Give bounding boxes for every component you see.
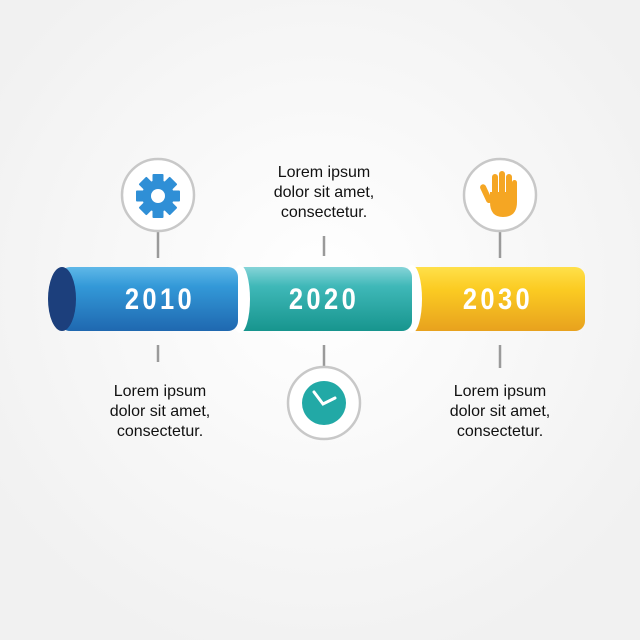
- text: 2030: consectetur.: [457, 423, 543, 440]
- icon: clock: [288, 367, 360, 439]
- text: 2030: Lorem ipsum: [454, 383, 546, 400]
- segment: 2030: 2030: [463, 282, 533, 315]
- timeline tube: [48, 265, 585, 333]
- text: 2010: dolor sit amet,: [110, 403, 210, 420]
- text: 2020: [274, 164, 374, 221]
- icon: gear: [122, 159, 194, 231]
- segment: 2020: [230, 265, 412, 333]
- text: 2010: Lorem ipsum: [114, 383, 206, 400]
- connector lines: [158, 230, 500, 368]
- text: 2030: [450, 383, 550, 440]
- text: 2010: [110, 383, 210, 440]
- text: 2020: Lorem ipsum: [278, 164, 370, 181]
- segment: 2030: [402, 265, 585, 333]
- text: 2020: consectetur.: [281, 204, 367, 221]
- icon: hand: [464, 159, 536, 231]
- segment: 2010: [48, 267, 238, 331]
- segment: 2020: 2020: [289, 282, 359, 315]
- text: 2010: consectetur.: [117, 423, 203, 440]
- segment: 2010: 2010: [125, 282, 195, 315]
- text: 2030: dolor sit amet,: [450, 403, 550, 420]
- text: 2020: dolor sit amet,: [274, 184, 374, 201]
